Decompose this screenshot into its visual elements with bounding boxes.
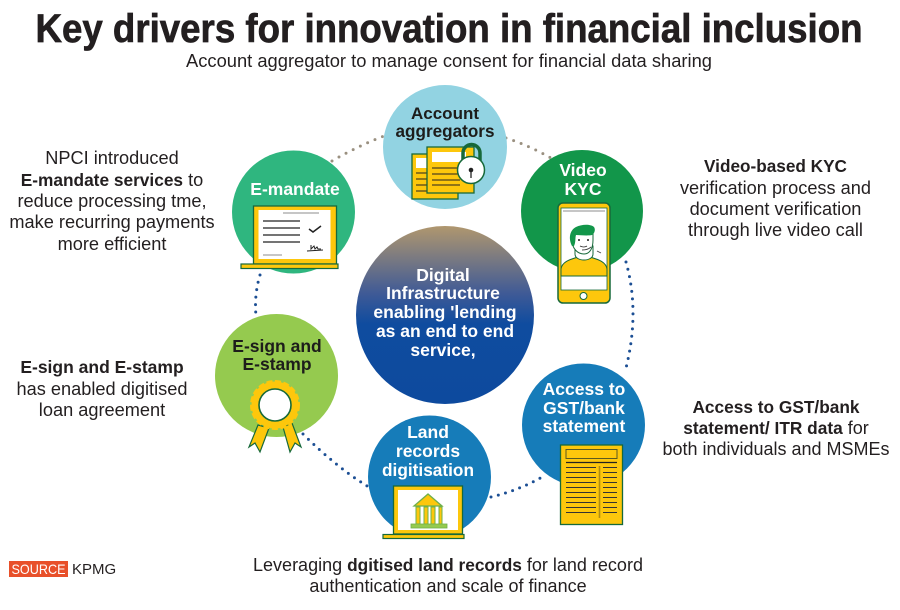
node: access to GST/bank statement: GST/bank (543, 398, 625, 418)
node: video KYC: KYC (565, 179, 602, 199)
text block: e-mandate: E-mandate services to (21, 170, 203, 190)
central circle: digital infrastructure: enabling 'lending (373, 302, 517, 322)
icon: phone with agent (558, 203, 610, 303)
text block: GST: statement/ ITR data for (683, 418, 869, 438)
central circle: digital infrastructure: Infrastructure (386, 283, 500, 303)
icon: laptop with signed form (241, 206, 338, 268)
text block: video KYC: through live video call (688, 220, 863, 240)
node: E-mandate (232, 150, 355, 274)
node: account aggregators: Account (411, 104, 479, 123)
text block: e-mandate: make recurring payments (9, 212, 215, 232)
text block: e-mandate (9, 148, 215, 254)
node: access to GST/bank statement: statement (543, 416, 626, 436)
source tag (9, 561, 116, 578)
dotted connector ring (256, 136, 633, 497)
node: E-sign and E-stamp: E-sign and (232, 336, 322, 356)
text block: e-sign (17, 357, 187, 420)
icon: statement document (560, 445, 622, 524)
icon: laptop with bank building (383, 486, 464, 538)
text block: e-sign: loan agreement (39, 400, 165, 420)
source tag: SOURCE (12, 561, 66, 577)
node: land records digitisation: digitisation (382, 460, 474, 480)
text block: video KYC: verification process and (680, 178, 871, 198)
node: access to GST/bank statement (522, 364, 645, 524)
node: account aggregators (383, 85, 507, 209)
node: land records digitisation: Land (407, 422, 449, 442)
text block: land records: authentication and scale of finance (309, 576, 587, 596)
node: video KYC (521, 150, 643, 303)
text block: GST (662, 397, 890, 459)
central circle: digital infrastructure: Digital (416, 265, 470, 285)
central circle: digital infrastructure (356, 226, 534, 404)
central circle: digital infrastructure: as an end to end (376, 321, 514, 341)
icon: documents with padlock (412, 144, 484, 199)
node: land records digitisation (368, 416, 491, 538)
text block: GST: both individuals and MSMEs (662, 439, 890, 459)
text block: video KYC: Video-based KYC (704, 156, 847, 176)
text block: land records: Leveraging dgitised land records for land record (253, 555, 643, 575)
node: video KYC: Video (559, 160, 607, 180)
central circle: digital infrastructure: service, (410, 340, 476, 360)
text block: GST: Access to GST/bank (692, 397, 860, 417)
node: E-sign and E-stamp: E-stamp (242, 354, 312, 374)
node: E-mandate: E-mandate (250, 179, 340, 199)
text block: video KYC: document verification (690, 199, 861, 219)
source tag: KPMG (72, 561, 116, 578)
text block: e-sign: E-sign and E-stamp (20, 357, 184, 377)
icon: rosette badge (249, 382, 301, 452)
text block: e-mandate: more efficient (58, 234, 166, 254)
node: E-sign and E-stamp (215, 314, 338, 452)
text block: e-mandate: NPCI introduced (45, 148, 179, 168)
node: account aggregators: aggregators (396, 121, 495, 141)
subtitle: Account aggregator to manage consent for financial data sharing (186, 51, 712, 71)
text block: e-sign: has enabled digitised (17, 379, 187, 399)
text block: e-mandate: reduce processing tme, (17, 191, 207, 211)
node: land records digitisation: records (396, 441, 460, 461)
text block: land records (253, 555, 643, 596)
node: access to GST/bank statement: Access to (543, 379, 625, 399)
text block: video KYC (680, 156, 871, 240)
